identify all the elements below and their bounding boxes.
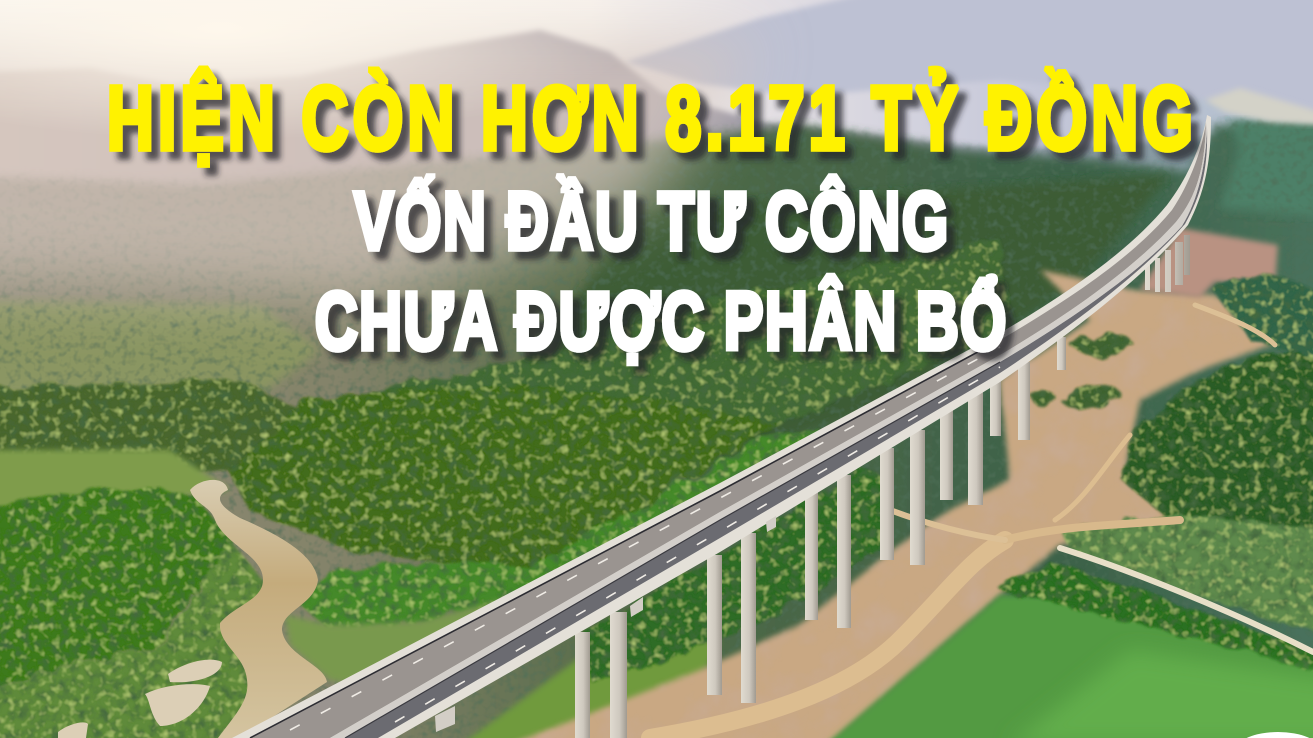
bright paddy xyxy=(1010,650,1313,738)
hedge along the field xyxy=(1000,562,1313,675)
pink clearing at upper right xyxy=(1140,228,1278,298)
median shadow xyxy=(345,362,1000,738)
river bank xyxy=(285,600,530,690)
central far forest xyxy=(360,240,1010,425)
title line 3: CHƯA ĐƯỢC PHÂN BỔ xyxy=(315,274,1006,367)
background: far mountains xyxy=(0,0,1313,320)
right forest xyxy=(1120,335,1313,610)
green rice field xyxy=(825,595,1313,738)
lower right scrub xyxy=(1060,515,1313,640)
small white corner shape xyxy=(1236,732,1313,738)
ponds xyxy=(58,660,222,738)
forest under the bridge xyxy=(585,470,885,680)
girder and barriers xyxy=(232,115,1211,738)
left forest xyxy=(0,490,235,700)
lane dashes xyxy=(290,347,1000,730)
girder brackets xyxy=(435,516,776,732)
title line 2: VỐN ĐẦU TƯ CÔNG xyxy=(354,173,948,267)
haze over the hills xyxy=(0,40,760,300)
title line 1: HIỆN CÒN HƠN 8.171 TỶ ĐỒNG xyxy=(107,68,1193,169)
tree clumps on the construction site xyxy=(1030,334,1135,408)
meadow under the bridge xyxy=(440,640,720,738)
near carriageway xyxy=(345,128,1207,738)
barrier shadow xyxy=(250,340,1000,738)
far right hillside xyxy=(1220,120,1313,218)
construction site on the far hill xyxy=(1205,88,1313,125)
central forest xyxy=(228,385,780,575)
grass meadow xyxy=(0,450,230,515)
bridge piers xyxy=(575,235,1190,738)
sun glow xyxy=(0,0,640,140)
median xyxy=(330,122,1207,738)
dirt construction ground xyxy=(510,270,1278,738)
title xyxy=(107,68,1193,367)
forest beside the site xyxy=(1212,270,1313,362)
left lowland xyxy=(0,380,300,480)
bridge deck xyxy=(232,115,1211,738)
river xyxy=(190,480,327,738)
left grass and banks xyxy=(0,540,270,738)
far carriageway xyxy=(250,122,1206,738)
dirt roads xyxy=(650,305,1313,738)
riverside shrubs xyxy=(295,430,820,630)
